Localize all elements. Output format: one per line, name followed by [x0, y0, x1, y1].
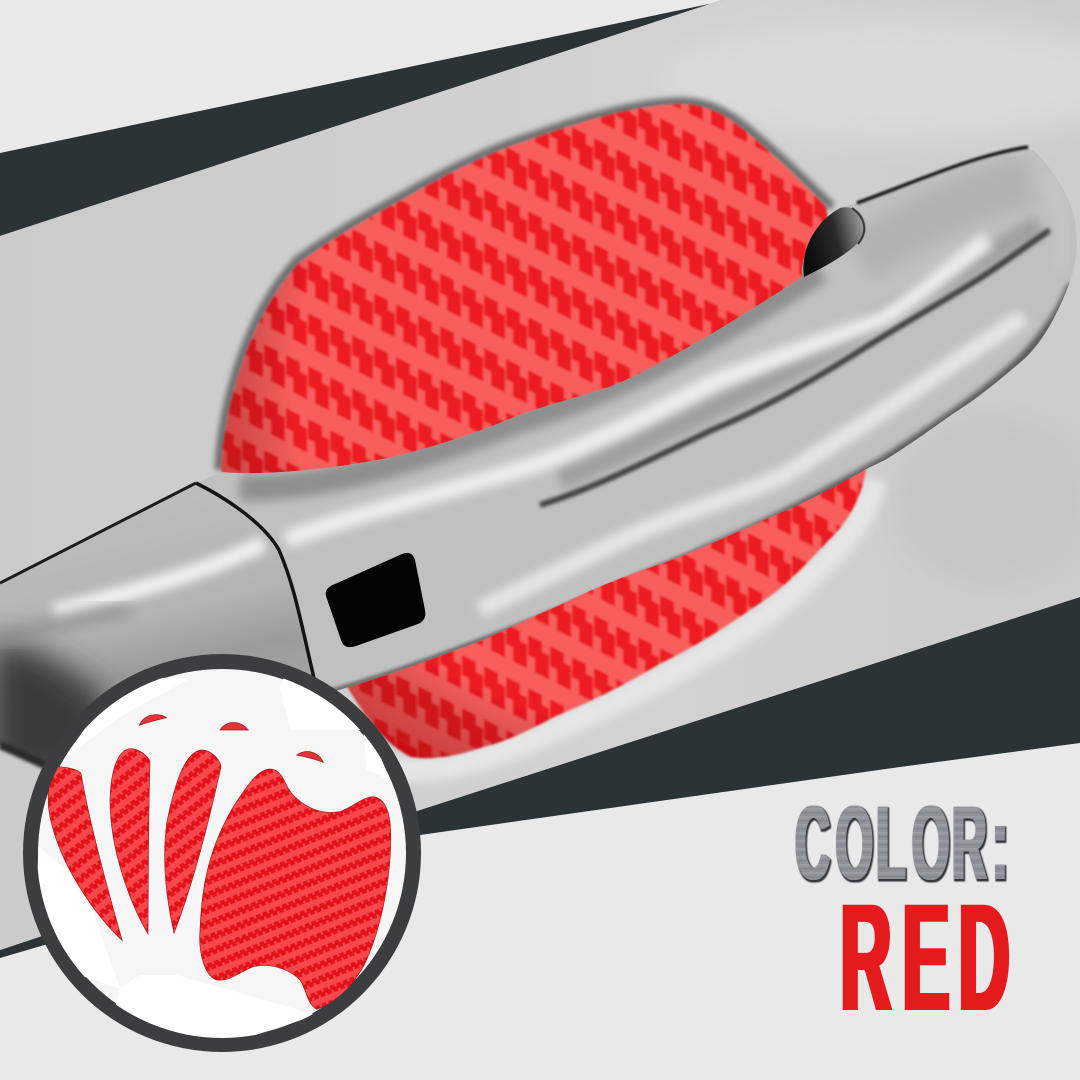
sticker: small cap three — [297, 752, 323, 762]
sticker: small cap one — [139, 715, 167, 725]
sticker: strip two — [110, 749, 150, 934]
upper dark band — [240, 270, 820, 488]
sticker: large cover — [200, 769, 391, 1009]
upper right surface — [860, 180, 1030, 260]
sticker shadow rim — [219, 102, 832, 470]
first highlight — [286, 240, 988, 540]
crease — [540, 230, 1050, 505]
lower dark band — [0, 597, 1080, 958]
handle top edge line — [857, 147, 1028, 203]
sticker: small cap two — [220, 722, 248, 730]
door light areas — [385, 20, 1080, 770]
door handle — [196, 147, 1077, 695]
lower edge shadow — [700, 285, 1072, 552]
sticker edge shading — [220, 258, 546, 760]
sticker: strip three — [165, 750, 221, 933]
sticker pieces — [48, 715, 391, 1009]
product inset circle — [23, 654, 421, 1052]
white sheet patches — [37, 670, 390, 1047]
lower edge shade near key — [330, 550, 700, 692]
top dark band — [0, 0, 728, 236]
band above crease — [560, 225, 1040, 480]
label: RED: RED — [840, 873, 1010, 1043]
sticker: strip one — [48, 767, 122, 941]
key slot — [326, 553, 425, 647]
finger recess — [803, 207, 866, 277]
handle base — [0, 483, 318, 780]
red carbon sticker — [221, 104, 866, 758]
label: COLOR: COLOR: — [795, 785, 1008, 902]
handle joint line — [196, 483, 318, 695]
second highlight — [480, 317, 1023, 610]
nose highlight — [1048, 230, 1052, 234]
